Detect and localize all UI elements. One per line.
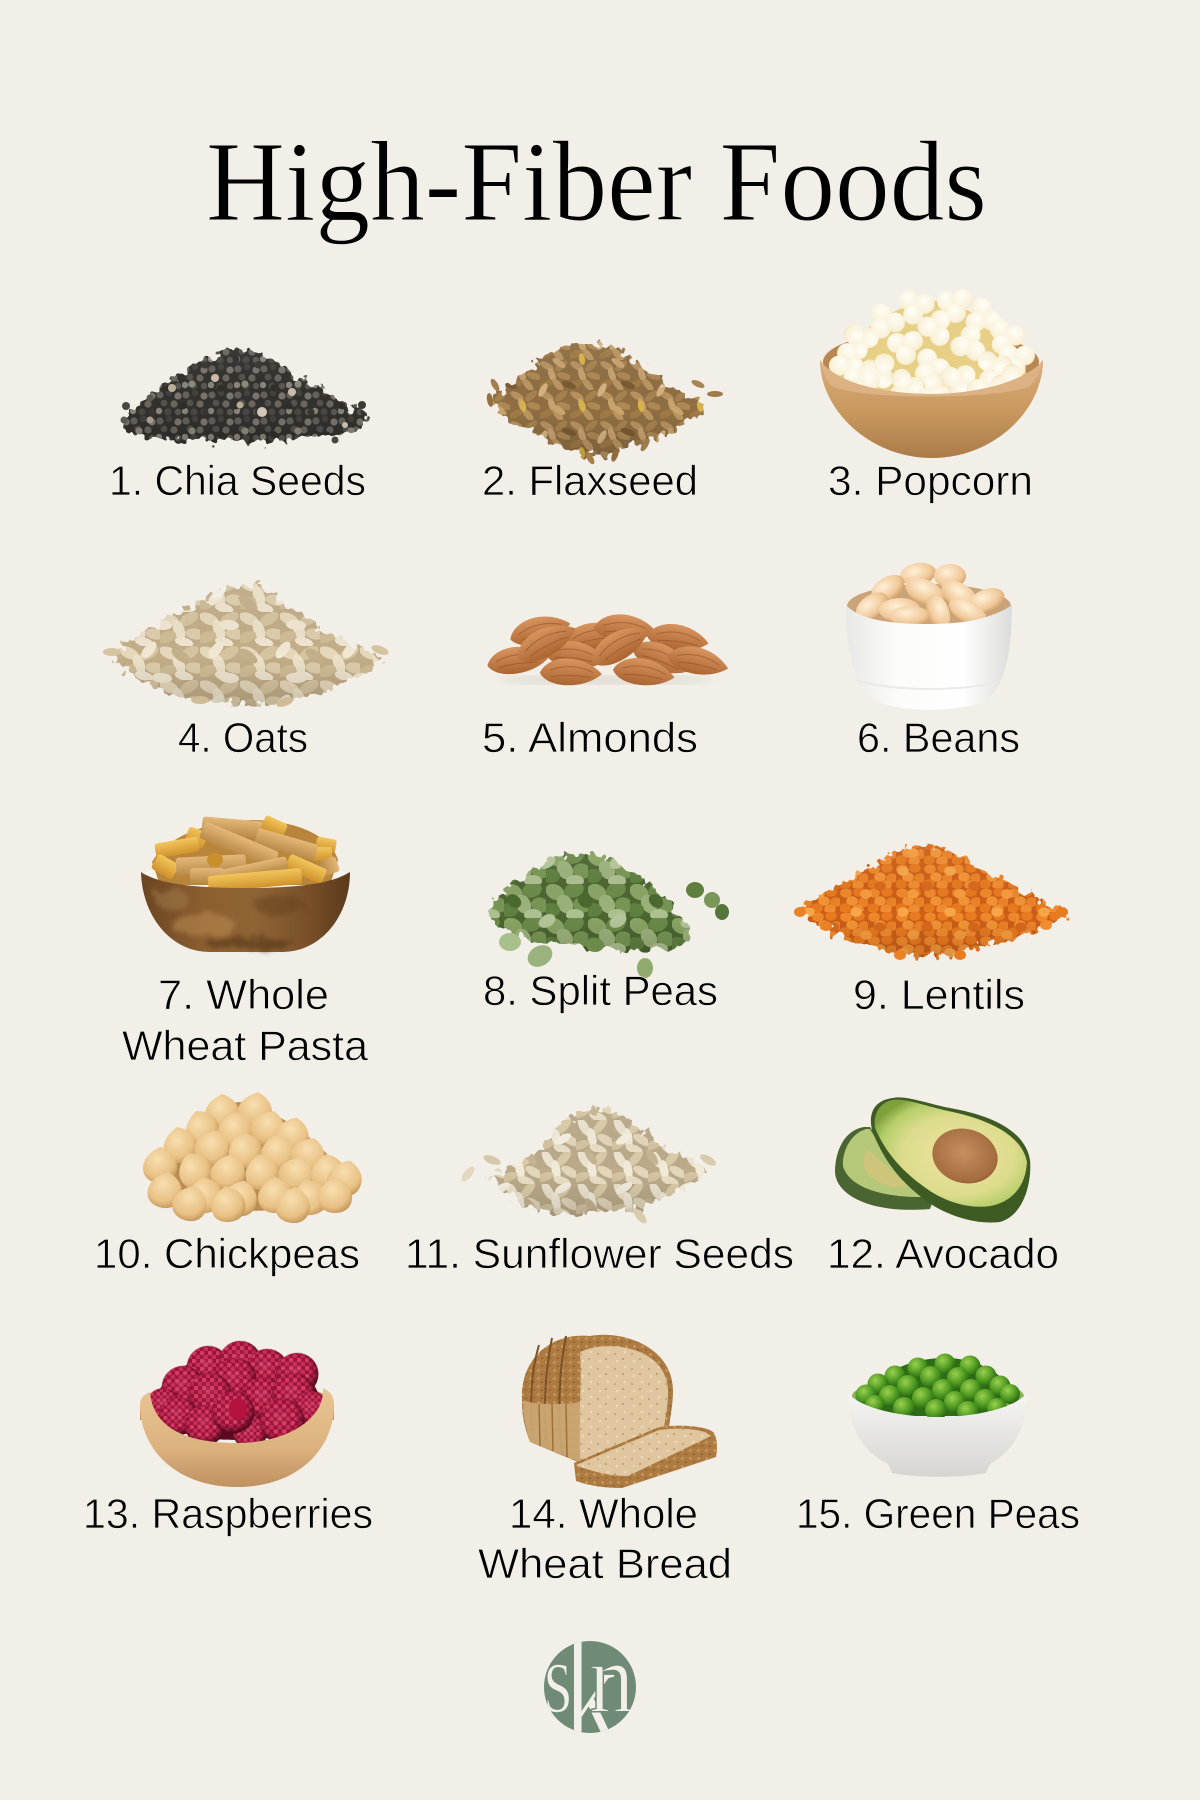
panel: green peas [796,1354,1080,1537]
label: Wheat Pasta [122,1022,369,1069]
panel: split peas [485,851,729,1014]
label: 8. Split Peas [483,967,718,1014]
label: 12. Avocado [827,1230,1059,1277]
label: 10. Chickpeas [94,1230,360,1277]
icon: sunflower seed pile [462,1105,716,1224]
panel: sunflower seeds [408,1105,792,1268]
label: 6. Beans [857,714,1020,761]
icon: red lentil pile [794,844,1070,961]
label: 15. Green Peas [796,1490,1080,1537]
icon: bowl of raspberries [140,1340,334,1487]
logo: skn monogram: k [564,1611,618,1775]
panel: flaxseed [484,339,723,496]
panel: whole wheat pasta [122,815,369,1069]
label: 14. Whole [509,1490,698,1537]
logo: skn monogram: n [589,1623,634,1734]
icon: avocado halves [835,1097,1030,1223]
panel: avocado [827,1097,1059,1277]
label: 7. Whole [158,971,329,1018]
icon: bowl of green peas [848,1354,1027,1477]
label: 11. Sunflower Seeds [405,1230,794,1277]
panel: popcorn [820,286,1043,504]
icon: flaxseed pile [486,339,723,464]
panel: oats [103,580,388,752]
panel: almonds [482,611,731,761]
panel: raspberries [83,1340,373,1537]
icon: split pea pile [488,851,729,978]
panel: chickpeas [94,1089,366,1277]
icon: oats pile [103,580,388,708]
label: 2. Flaxseed [482,457,698,504]
icon: chia seed pile [120,347,370,448]
panel: whole wheat bread [478,1335,732,1587]
label: Wheat Bread [478,1540,732,1587]
label: 9. Lentils [853,971,1025,1018]
panel: chia seeds [112,347,370,496]
label: 5. Almonds [482,714,698,761]
icon: sliced bread loaf [522,1335,717,1488]
label: 3. Popcorn [828,457,1033,504]
icon: cup of white beans [846,560,1012,710]
icon: bowl of popcorn [820,286,1043,458]
title: High-Fiber Foods [206,118,987,245]
logo: skn monogram: s [544,1622,572,1735]
logo: skn monogram [544,1641,636,1733]
panel: beans [846,560,1020,761]
label: 1. Chia Seeds [109,457,366,504]
panel: lentils [794,844,1070,1010]
icon: chickpea pile [143,1089,366,1225]
icon: bowl of pasta [141,815,350,952]
label: 13. Raspberries [83,1490,373,1537]
label: 4. Oats [178,714,308,761]
icon: almonds [486,611,731,691]
